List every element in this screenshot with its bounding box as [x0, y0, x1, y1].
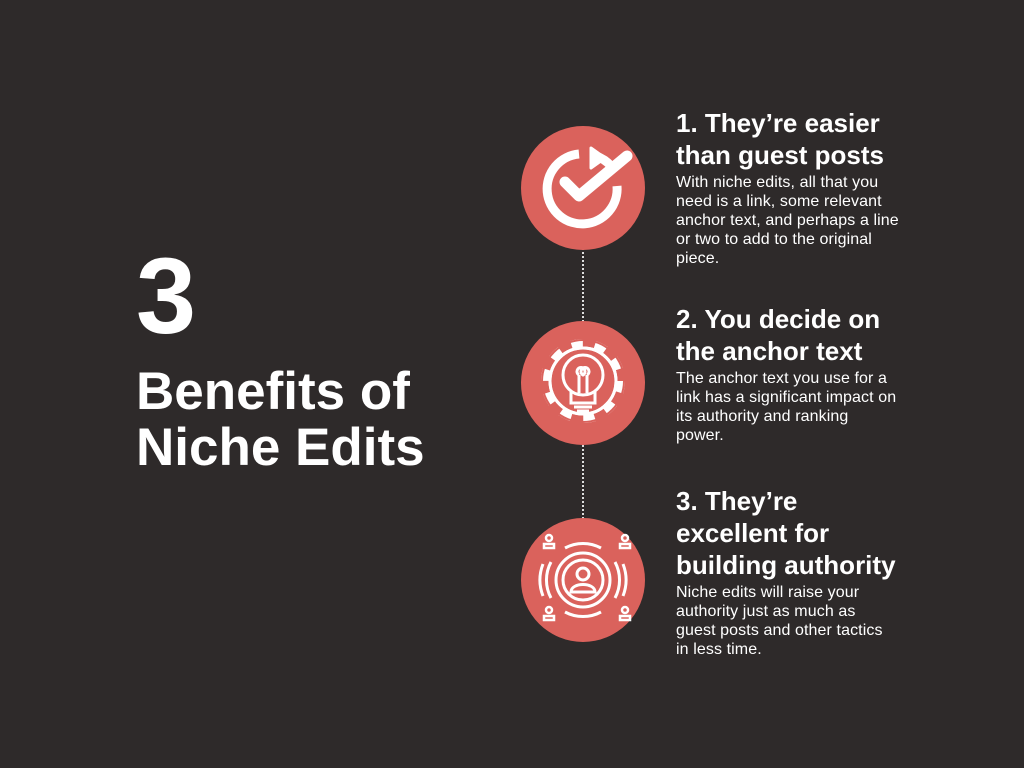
- item 1: [676, 108, 899, 267]
- item 1: With niche edits, all that you need is a link, some relevant anchor text, and perhaps a line or two to add to the original piece.: [676, 174, 899, 267]
- item 1: 1. They’re easier than guest posts: [676, 108, 884, 170]
- title: Benefits of: [136, 362, 410, 421]
- item 3: Niche edits will raise your authority just as much as guest posts and other tactics in less time.: [676, 584, 883, 658]
- item 3: 3. They’re excellent for building authority: [676, 486, 896, 580]
- item 2: 2. You decide on the anchor text: [676, 304, 880, 366]
- title: [136, 235, 425, 477]
- item 3: [676, 486, 896, 658]
- item 2: The anchor text you use for a link has a significant impact on its authority and ranking power.: [676, 370, 896, 444]
- icon: gear bulb: [521, 321, 645, 445]
- item 2: [676, 304, 896, 444]
- title: Niche Edits: [136, 418, 425, 477]
- icon: people authority: [521, 518, 645, 642]
- icon: refresh check: [521, 126, 645, 250]
- title: 3: [136, 235, 196, 356]
